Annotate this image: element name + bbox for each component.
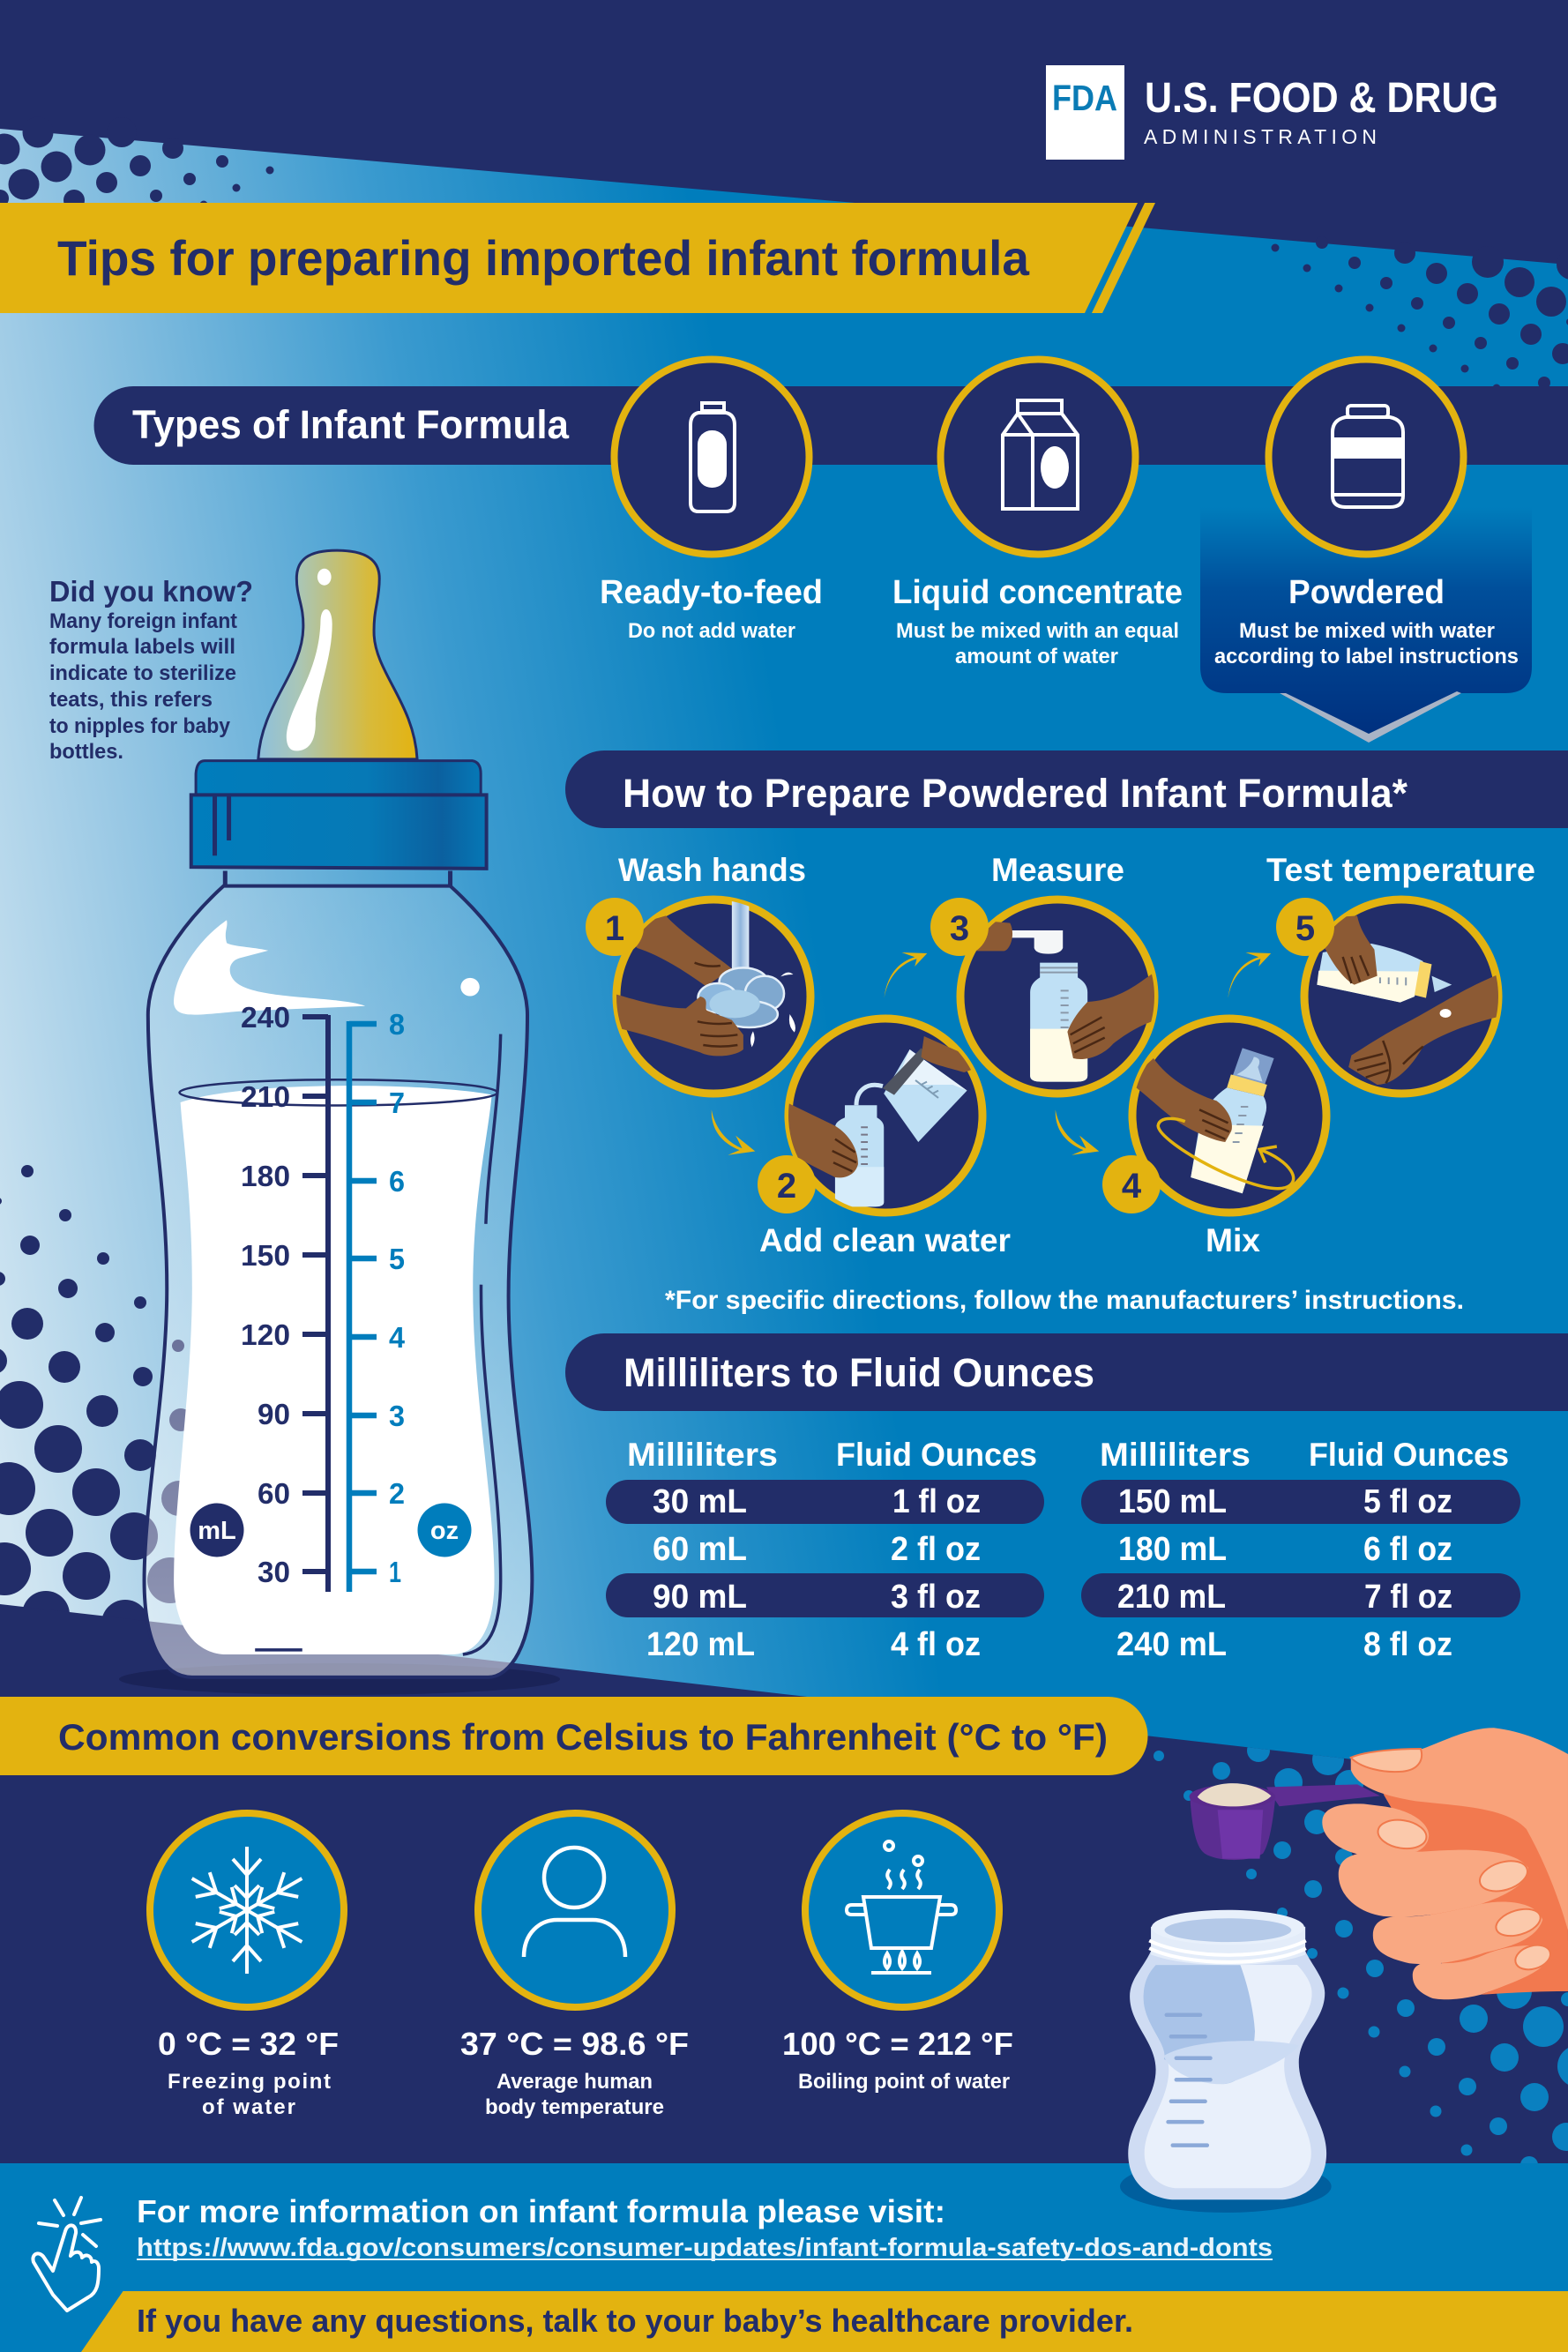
oz scale: 5: [389, 1243, 405, 1275]
text block: did you know: Many foreign infant: [49, 609, 237, 633]
step 1: wash hands: Wash hands: [618, 852, 806, 888]
step 5: test temperature: Test temperature: [1266, 852, 1535, 888]
table header: Fluid Ounces: [1309, 1437, 1509, 1473]
label: liquid concentrate: Must be mixed with an equal: [896, 619, 1179, 643]
icon: tap hand: [33, 2198, 101, 2311]
panel: how to prepare powdered infant formula: [565, 750, 1568, 1315]
label: freezing point: Freezing point: [168, 2070, 331, 2094]
bottle cap: [191, 761, 487, 887]
oz scale: 4: [389, 1321, 406, 1354]
step number badges: 3: [950, 909, 969, 948]
label: ready-to-feed: Do not add water: [628, 619, 795, 643]
hand: [1322, 1728, 1568, 1999]
heading bar: [565, 1333, 1568, 1411]
footer text: questions: If you have any questions, talk to your baby’s healthcare provider.: [137, 2303, 1133, 2339]
table rows: 240 mL: [1116, 1626, 1227, 1663]
step number badges: 1: [605, 909, 624, 948]
mL scale: 180: [241, 1160, 290, 1192]
dots: bottom left: [0, 1165, 197, 1647]
step 1: wash hands: [609, 852, 810, 1094]
mL scale: 150: [241, 1239, 290, 1272]
table rows: 2 fl oz: [891, 1531, 981, 1568]
top navy header shape: [0, 0, 1568, 265]
table rows: 90 mL: [653, 1579, 747, 1616]
step 2: add clean water: Add clean water: [759, 1222, 1011, 1258]
icon: liquid concentrate carton: [940, 360, 1136, 554]
table rows: 6 fl oz: [1363, 1531, 1452, 1568]
text block: did you know: teats, this refers: [49, 688, 213, 712]
heading bar: [565, 750, 1568, 828]
heading bar: [94, 386, 1568, 465]
text block: did you know: bottles.: [49, 740, 123, 764]
label: boiling point: [782, 2026, 1013, 2094]
oz scale: 7: [389, 1086, 405, 1119]
baby bottle jar: [1128, 1910, 1326, 2199]
measuring scoop: [1190, 1783, 1380, 1860]
table rows: [606, 1480, 1520, 1663]
title banner: Tips for preparing imported infant formula: [57, 230, 1030, 286]
FDA logo: U.S. FOOD & DRUG: [1145, 75, 1498, 122]
jar shadow: [1120, 2161, 1332, 2213]
label: powdered: Powdered: [1288, 574, 1445, 611]
label: liquid concentrate: [892, 574, 1183, 668]
bottle shadow: [119, 1663, 560, 1695]
FDA logo: ADMINISTRATION: [1144, 125, 1377, 148]
table header: Fluid Ounces: [836, 1437, 1037, 1473]
FDA logo: FDA: [1052, 78, 1117, 118]
FDA logo: [1046, 65, 1498, 160]
table rows: 210 mL: [1117, 1579, 1226, 1616]
arrows between steps: [712, 952, 1271, 1155]
label: body temperature: 37 °C = 98.6 °F: [460, 2026, 689, 2062]
chevron under powdered callout: [1280, 691, 1461, 743]
text block: did you know: indicate to sterilize: [49, 661, 236, 685]
label: body temperature: [460, 2026, 689, 2119]
mL badge: [190, 1503, 243, 1557]
footer text: more information: [137, 2193, 1273, 2262]
oz scale: 6: [389, 1165, 405, 1198]
table rows: 8 fl oz: [1363, 1626, 1452, 1663]
text block: did you know: Did you know?: [49, 575, 253, 608]
footer text: more information: For more information on infant formula please visit:: [137, 2193, 945, 2229]
table rows: 4 fl oz: [891, 1626, 981, 1663]
table rows: 60 mL: [653, 1531, 747, 1568]
heading bar: How to Prepare Powdered Infant Formula*: [623, 771, 1407, 816]
label: freezing point: [158, 2026, 339, 2119]
table rows: 120 mL: [646, 1626, 755, 1663]
table rows: 5 fl oz: [1363, 1483, 1452, 1520]
illustration: hand with scoop and jar: [1120, 1728, 1568, 2213]
icon: powdered formula jar: [1268, 360, 1464, 554]
oz badge: oz: [430, 1517, 459, 1545]
oz scale: 2: [389, 1477, 405, 1510]
heading bar: Types of Infant Formula: [132, 402, 570, 447]
step number badges: 2: [777, 1167, 796, 1206]
icon: ready-to-feed bottle: [614, 360, 810, 554]
mL badge: mL: [198, 1517, 236, 1545]
temperature heading banner: Common conversions from Celsius to Fahrenheit (°C to °F): [58, 1716, 1108, 1758]
label: boiling point: 100 °C = 212 °F: [782, 2026, 1013, 2062]
footer text: more information: https://www.fda.gov/consumers/consumer-updates/infant-formula-safety-dos-and-donts: [137, 2234, 1273, 2262]
footer gold bar: [81, 2291, 1568, 2352]
table header: [627, 1437, 1509, 1473]
step 4: mix: [1128, 1019, 1326, 1258]
temperature heading banner: [0, 1697, 1148, 1775]
step number badges: [586, 898, 1334, 1213]
mL scale: 60: [258, 1477, 290, 1510]
label: body temperature: Average human: [497, 2070, 653, 2094]
oz badge: [418, 1503, 471, 1557]
table rows: 7 fl oz: [1364, 1579, 1452, 1616]
table rows: 180 mL: [1118, 1531, 1227, 1568]
table header: Milliliters: [1100, 1437, 1251, 1473]
panel: powdered highlight callout: [1200, 507, 1532, 740]
oz scale: [349, 1008, 406, 1592]
label: powdered: Must be mixed with water: [1239, 619, 1495, 643]
table rows: 30 mL: [653, 1483, 747, 1520]
mL scale: [241, 1001, 328, 1592]
mL scale: 90: [258, 1398, 290, 1430]
step 3: measure: [960, 852, 1166, 1094]
table rows: 3 fl oz: [891, 1579, 981, 1616]
icon: snowflake: [150, 1813, 344, 2007]
label: powdered: [1214, 574, 1519, 668]
panel: temperature conversions: [150, 1813, 1013, 2119]
mL scale: 120: [241, 1318, 290, 1351]
label: body temperature: body temperature: [485, 2095, 664, 2119]
label: freezing point: of water: [202, 2095, 295, 2119]
heading bar: Milliliters to Fluid Ounces: [623, 1350, 1094, 1395]
label: ready-to-feed: Ready-to-feed: [600, 574, 823, 611]
dots: top left: [0, 116, 273, 211]
text block: did you know: to nipples for baby: [49, 714, 231, 738]
oz scale: 8: [389, 1008, 405, 1041]
footnote: *For specific directions, follow the manufacturers’ instructions.: [665, 1286, 1464, 1315]
table header: Milliliters: [627, 1437, 778, 1473]
bottle nipple: [258, 550, 417, 759]
label: ready-to-feed: [600, 574, 823, 643]
illustration: large baby bottle: [145, 550, 532, 1677]
title banner: [0, 203, 1155, 313]
dots: top right: [1272, 236, 1568, 392]
step number badges: 4: [1122, 1167, 1142, 1206]
label: liquid concentrate: amount of water: [955, 645, 1118, 668]
dots: bottom right: [1154, 1739, 1568, 2174]
oz scale: 1: [389, 1556, 401, 1588]
step number badges: 5: [1295, 909, 1315, 948]
mL scale: 210: [241, 1080, 290, 1113]
panel: milliliters to fluid ounces: [565, 1333, 1568, 1663]
table rows: 150 mL: [1118, 1483, 1227, 1520]
label: freezing point: 0 °C = 32 °F: [158, 2026, 339, 2062]
step 5: test temperature: [1266, 852, 1535, 1094]
table rows: 1 fl oz: [892, 1483, 981, 1520]
label: boiling point: Boiling point of water: [798, 2070, 1010, 2094]
label: liquid concentrate: Liquid concentrate: [892, 574, 1183, 611]
mL scale: 30: [258, 1556, 290, 1588]
bottle body and milk: [145, 886, 532, 1677]
text block: did you know: [49, 575, 253, 764]
label: powdered: according to label instructions: [1214, 645, 1519, 668]
icon: person: [478, 1813, 672, 2007]
footer blue band: [0, 2163, 1568, 2352]
text block: did you know: formula labels will: [49, 635, 235, 659]
step 4: mix: Mix: [1206, 1222, 1260, 1258]
panel: types of infant formula: [94, 360, 1568, 668]
oz scale: 3: [389, 1400, 405, 1432]
icon: boiling pot: [805, 1813, 999, 2007]
step 2: add clean water: [759, 1019, 1011, 1258]
step 3: measure: Measure: [991, 852, 1124, 888]
mL scale: 240: [241, 1001, 290, 1034]
lower navy section: [0, 1604, 1568, 2163]
